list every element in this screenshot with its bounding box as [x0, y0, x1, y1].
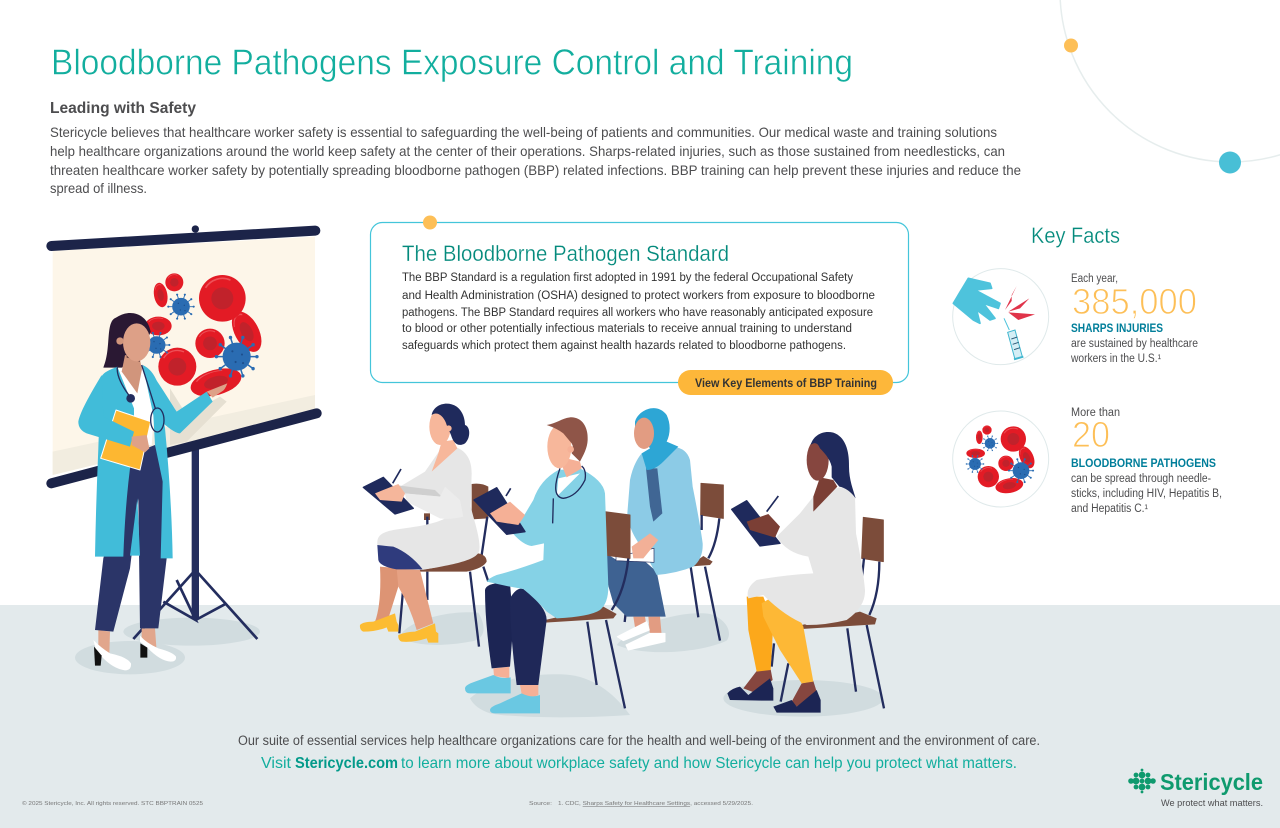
- fact 1 label: SHARPS INJURIES: [1071, 323, 1163, 335]
- screen stand: [133, 448, 257, 639]
- floor shadows: [75, 618, 260, 674]
- logo: [1128, 769, 1263, 809]
- fact 2 number: 20: [1072, 414, 1110, 455]
- fact 2 text: More than: [1071, 407, 1120, 419]
- presenter figure: [78, 313, 227, 670]
- fact icon: needlestick: [953, 269, 1049, 365]
- blood cells and viruses on screen: [143, 273, 268, 401]
- floor: [0, 605, 1280, 828]
- projection screen: [51, 225, 317, 483]
- panel body: safeguards which protect them against health hazards related to bloodborne pathogens.: [402, 340, 846, 352]
- key facts heading: Key Facts: [1031, 223, 1120, 248]
- source note: Source:: [529, 801, 553, 807]
- intro paragraph: Stericycle believes that healthcare worker safety is essential to safeguarding the well-being of patients and communities. Our medical waste and training solutions: [50, 124, 997, 140]
- fact 2 label: BLOODBORNE PATHOGENS: [1071, 458, 1216, 470]
- call to action: to learn more about workplace safety and how Stericycle can help you protect what matters.: [401, 755, 1017, 772]
- intro paragraph: spread of illness.: [50, 180, 147, 196]
- call to action: Visit: [261, 755, 292, 772]
- panel body: and Health Administration (OSHA) designed to protect workers from exposure to bloodborne: [402, 290, 875, 302]
- attendee: woman in white coat with navy skirt: [360, 404, 488, 647]
- presenter with projection screen: [51, 225, 317, 674]
- attendee: woman with dark hair and yellow pants: [723, 432, 884, 717]
- fact 2 text: and Hepatitis C.¹: [1071, 503, 1148, 515]
- fact 2 text: [1071, 407, 1222, 515]
- source note: 1. CDC, Sharps Safety for Healthcare Settings , accessed 5/29/2025.: [558, 801, 754, 807]
- intro paragraph: help healthcare organizations around the world keep safety at the center of their operations. Sharps-related injuries, such as those sustained from needlesticks, can: [50, 143, 1005, 159]
- panel body: to blood or other potentially infectious materials to receive annual training to understand: [402, 323, 852, 335]
- attendee: man in blue coat: [465, 417, 630, 717]
- fact 1 text: workers in the U.S.¹: [1070, 353, 1161, 365]
- logo wordmark: Stericycle: [1160, 769, 1263, 795]
- panel outline: [370, 222, 908, 382]
- button: [678, 370, 893, 395]
- closing statement: Our suite of essential services help healthcare organizations care for the health and well-being of the environment and the environment of care.: [238, 733, 1040, 748]
- fact 1 number: 385,000: [1072, 281, 1197, 322]
- fact 2 text: sticks, including HIV, Hepatitis B,: [1071, 488, 1222, 500]
- tagline: We protect what matters.: [1161, 798, 1263, 809]
- decorative arc with dots: [1060, 0, 1280, 174]
- title: Bloodborne Pathogens Exposure Control and Training: [51, 42, 853, 82]
- standard panel: [370, 216, 908, 395]
- fact 1 text: [1070, 273, 1198, 365]
- copyright: © 2025 Stericycle, Inc. All rights reserved. STC BBPTRAIN 0525: [22, 800, 203, 807]
- intro block: [50, 100, 1021, 196]
- intro heading: Leading with Safety: [50, 100, 196, 117]
- fact 2 text: can be spread through needle-: [1071, 473, 1211, 485]
- intro paragraph: [50, 124, 1021, 196]
- panel heading: The Bloodborne Pathogen Standard: [402, 241, 729, 266]
- logo mark: [1128, 769, 1156, 793]
- intro paragraph: threaten healthcare worker safety by potentially spreading bloodborne pathogen (BBP) related infections. BBP training can help prevent these injuries and reduce the: [50, 162, 1021, 178]
- attendee: woman in hijab: [606, 408, 729, 652]
- fact icon: blood cells: [953, 411, 1049, 507]
- fact 1 text: are sustained by healthcare: [1071, 338, 1198, 350]
- panel body: [402, 272, 875, 352]
- call to action: Stericycle.com: [295, 755, 398, 772]
- button: View Key Elements of BBP Training: [695, 376, 877, 390]
- fact 1 text: Each year,: [1071, 273, 1118, 285]
- panel body: pathogens. The BBP Standard requires all workers who have reasonably anticipated exposure: [402, 307, 873, 319]
- panel body: The BBP Standard is a regulation first adopted in 1991 by the federal Occupational Safety: [402, 272, 853, 284]
- yellow dot: [423, 216, 437, 230]
